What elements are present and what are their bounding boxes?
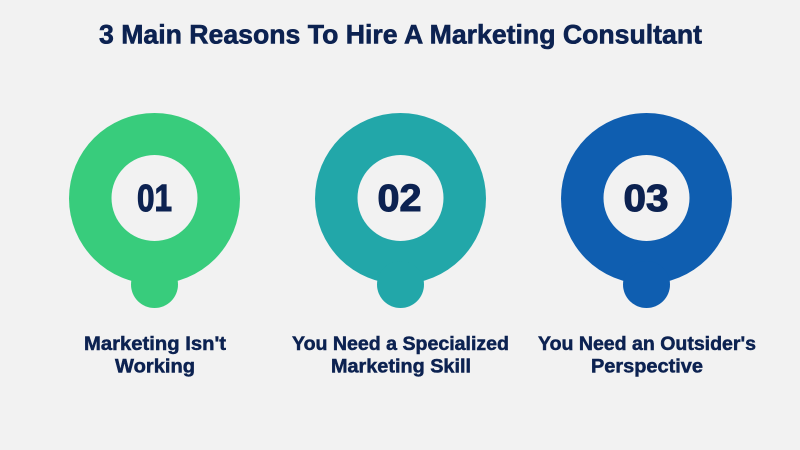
icon: blue pin ring 03: 03: [624, 178, 668, 220]
icon: teal pin ring 02: [315, 113, 486, 308]
panel: reason 1: [69, 113, 240, 378]
label: reason 3: You Need an Outsider's: [538, 333, 756, 355]
label: reason 2: Marketing Skill: [331, 356, 471, 378]
label: reason 1: Marketing Isn't: [84, 333, 227, 355]
label: reason 2: You Need a Specialized: [292, 333, 509, 355]
label: reason 1: Working: [115, 356, 195, 378]
title: 3 Main Reasons To Hire A Marketing Consultant: [99, 20, 702, 50]
panel: reason 3: [538, 113, 761, 378]
icon: green pin ring 01: [69, 113, 240, 308]
panel: reason 2: [292, 113, 514, 378]
icon: teal pin ring 02: 02: [378, 178, 422, 220]
icon: blue pin ring 03: [561, 113, 732, 308]
icon: green pin ring 01: 01: [137, 178, 172, 220]
label: reason 3: Perspective: [591, 356, 703, 378]
